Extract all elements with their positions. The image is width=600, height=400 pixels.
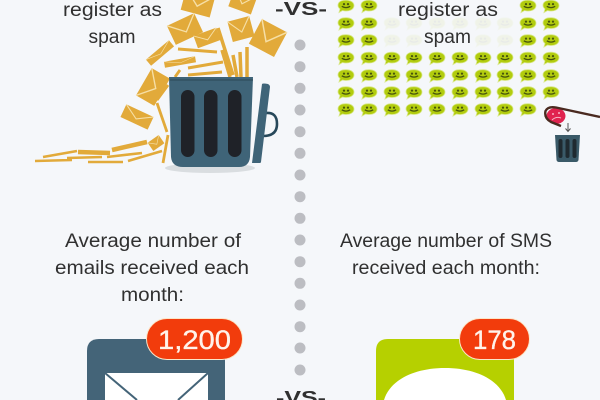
bin body: [169, 77, 253, 167]
text: SMS per month: [340, 231, 552, 279]
badge: 178 SMS: [460, 318, 530, 360]
heading: email spam: register as: [63, 0, 162, 21]
heading: email spam: spam: [88, 27, 136, 48]
row 1: [338, 0, 559, 12]
illustration: hook pulling red bubble into small bin: [545, 107, 600, 162]
badge: 178 SMS: 178: [473, 325, 516, 355]
heading: SMS spam: register as: [398, 0, 498, 21]
text: emails per month: emails received each: [55, 258, 249, 279]
row 6: [338, 87, 559, 99]
heading: SMS spam: [398, 0, 498, 48]
text: emails per month: month:: [121, 285, 184, 306]
faded bubbles behind heading: [384, 18, 513, 47]
bin handle: [263, 113, 277, 136]
text: emails per month: Average number of: [65, 231, 242, 252]
row 2: [338, 18, 559, 30]
icon: hook: [545, 107, 600, 126]
row 3: [338, 35, 559, 47]
illustration: envelopes falling into bin: [35, 0, 287, 173]
row 7: [338, 104, 536, 116]
icon: SMS tile: [376, 339, 514, 400]
dotted divider: [294, 40, 306, 376]
badge: 1,200 emails: 1,200: [158, 325, 231, 355]
bin slots: [181, 90, 242, 157]
badge: 1,200 emails: [146, 318, 242, 360]
icon: email envelope tile: [87, 339, 225, 400]
text: SMS per month: received each month:: [352, 258, 540, 279]
heading: email spam: [63, 0, 162, 48]
bin lid: [252, 84, 270, 163]
icon: red spam bubble: [546, 108, 566, 124]
icon: down arrow: [566, 123, 570, 132]
row 5: [338, 70, 559, 82]
row 4: [338, 52, 559, 64]
icon: small bin: [555, 135, 580, 162]
bin shadow: [165, 163, 255, 173]
envelopes: [120, 0, 287, 151]
envelope strips: [35, 28, 247, 163]
heading: SMS spam: spam: [424, 27, 471, 48]
text: SMS per month: Average number of SMS: [340, 231, 552, 252]
text: emails per month: [55, 231, 249, 306]
illustration: SMS smiley grid: [338, 0, 559, 116]
